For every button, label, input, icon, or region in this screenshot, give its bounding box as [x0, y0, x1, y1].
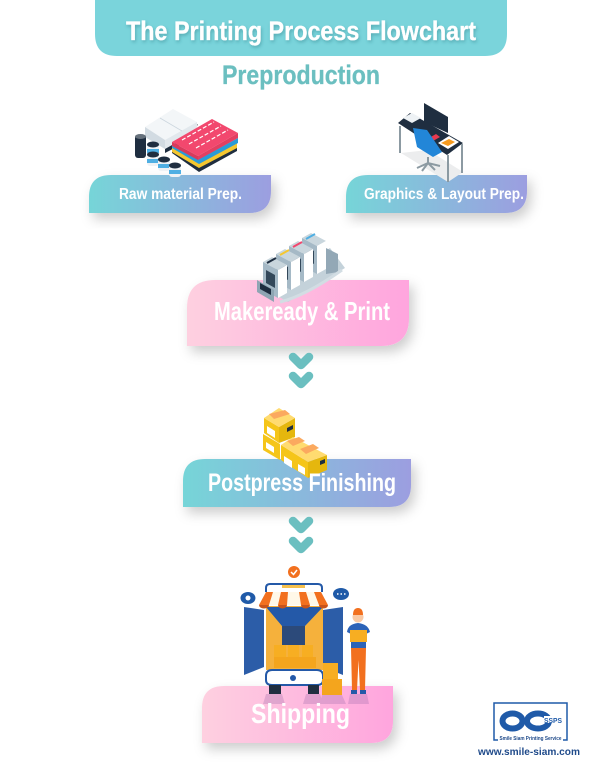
label box: shipping	[202, 686, 393, 743]
label: postpress text: Postpress Finishing	[208, 469, 396, 497]
logo: Smile Siam Printing Service: www.smile-siam.com	[477, 746, 580, 758]
logo: Smile Siam Printing Service: SSPS	[544, 718, 562, 725]
icon: delivery truck and courier	[240, 566, 370, 704]
icon: printing press	[257, 233, 345, 302]
title: The Printing Process Flowchart	[126, 16, 476, 46]
label box: graphics: Graphics & Layout Prep.	[364, 186, 524, 203]
icon: desk and chair	[398, 103, 463, 182]
heading: Preproduction: Preproduction	[222, 60, 380, 90]
icon: stacked boxes	[263, 408, 327, 478]
panel: raw material preparation	[89, 109, 271, 213]
label box: raw material	[89, 175, 271, 213]
arrow: down chevrons 1	[293, 357, 309, 384]
label box: makeready	[187, 280, 409, 346]
label box: raw material: Raw material Prep.	[119, 186, 242, 203]
title	[95, 0, 507, 56]
label box: postpress	[183, 459, 411, 507]
label: makeready text: Makeready & Print	[214, 296, 390, 326]
arrow: down chevrons 2	[293, 521, 309, 549]
panel: makeready and print	[187, 233, 409, 346]
logo: Smile Siam Printing Service	[477, 703, 580, 758]
panel: graphics and layout preparation	[346, 103, 527, 213]
icon: paper stacks and ink	[135, 109, 238, 177]
panel: shipping	[202, 566, 393, 743]
label: shipping text: Shipping	[251, 698, 350, 729]
logo: Smile Siam Printing Service: Smile Siam Printing Service	[500, 736, 562, 742]
label box: graphics	[346, 175, 527, 213]
panel: postpress finishing	[183, 408, 411, 507]
